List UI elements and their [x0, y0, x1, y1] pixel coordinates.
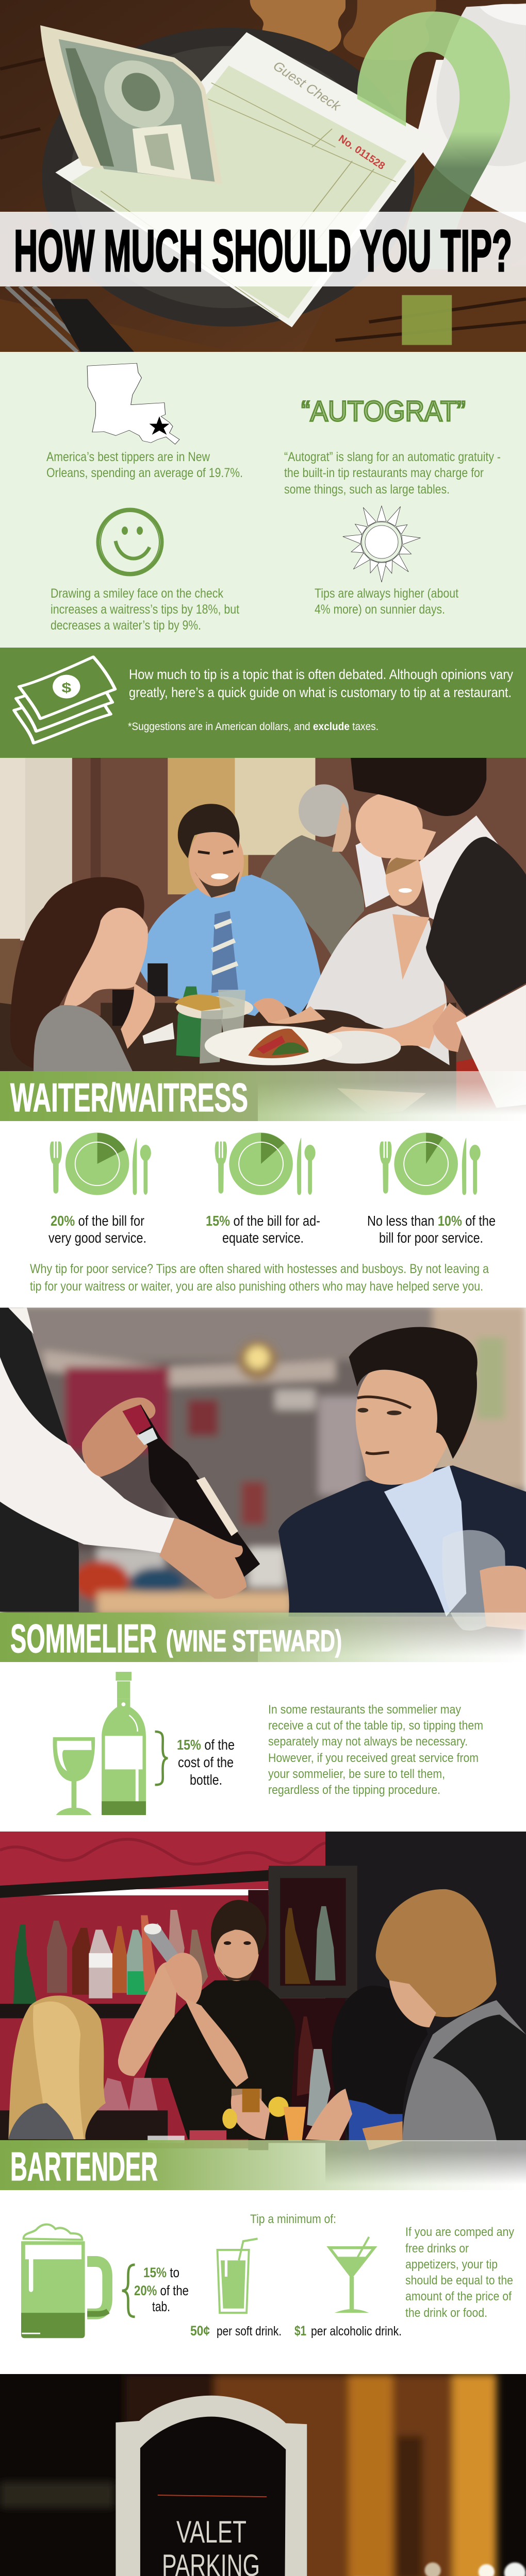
title band [0, 212, 526, 286]
footnote: *Suggestions are in American dollars, and exclude taxes. [128, 721, 379, 733]
text: alcoholic drink tip: per alcoholic drink. [311, 2324, 402, 2338]
note: sommelier: However, if you received great service from [268, 1751, 479, 1765]
text: 15% of bottle: 15% of the [177, 1737, 235, 1753]
photo: waitress serving diners [0, 756, 526, 1124]
fact: sunny days: 4% more) on sunnier days. [315, 602, 445, 617]
icon: beer mug [21, 2225, 135, 2338]
text: 15% tip: equate service. [222, 1230, 304, 1246]
note: comped drinks [405, 2225, 514, 2320]
icon: sun [342, 504, 421, 582]
guest check lettering: Guest Check [271, 58, 344, 114]
sign lettering [146, 2515, 273, 2576]
white fade under photo [258, 1623, 526, 1662]
heading: sommelier: SOMMELIER [10, 1616, 157, 1661]
text: 10% tip: No less than 10% of the [367, 1213, 496, 1229]
plate: 15% [215, 1132, 316, 1195]
note: comped drinks: the drink or food. [405, 2306, 487, 2320]
note: sommelier: In some restaurants the sommelier may [268, 1703, 461, 1717]
icon: soft drink [218, 2239, 258, 2313]
fact: Autograt: some things, such as large tables. [284, 482, 450, 497]
text: 15% of bottle [177, 1737, 235, 1788]
fact: smiley: increases a waitress’s tips by 18%, but [51, 602, 239, 617]
text: 20% tip: 20% of the bill for [51, 1213, 144, 1229]
text: soft drink tip: 50¢ [190, 2323, 210, 2338]
white fade under photo [258, 2151, 526, 2190]
white fade under photo [258, 1082, 526, 1121]
text: 15% to 20%: 20% of the [134, 2283, 189, 2298]
heading: Autograt: “AUTOGRAT” [301, 395, 466, 427]
guest check lettering: No. 011528 [336, 133, 387, 172]
fact: New Orleans [46, 450, 243, 480]
icon: stack of money [14, 657, 115, 743]
text: 15% of bottle: bottle. [190, 1772, 222, 1788]
icon: stack of money: $ [61, 680, 71, 696]
fact: smiley: Drawing a smiley face on the check [51, 586, 223, 601]
icon: smiley [98, 510, 162, 574]
text: 20% tip: very good service. [48, 1230, 146, 1246]
note: comped drinks: free drinks or [405, 2242, 469, 2256]
note: sommelier [268, 1703, 483, 1797]
plate: 20% [50, 1132, 151, 1195]
panel: intro [0, 648, 526, 758]
fact: New Orleans: Orleans, spending an average of 19.7%. [46, 466, 243, 480]
brace [122, 2265, 135, 2317]
note: comped drinks: appetizers, your tip [405, 2258, 498, 2272]
note: sommelier: receive a cut of the table tip, so tipping them [268, 1719, 483, 1733]
photo: bartender shaking a cocktail [0, 1832, 526, 2193]
note: why tip for poor service [30, 1262, 489, 1294]
fact: Autograt: the built-in tip restaurants may charge for [284, 466, 484, 480]
plate: 10% [380, 1132, 481, 1195]
photo: sommelier presenting wine [0, 1304, 526, 1666]
section band: waiter [0, 1071, 526, 1121]
section band: sommelier [0, 1613, 526, 1662]
text: 15% of bottle: cost of the [178, 1754, 234, 1770]
fact: sunny days: Tips are always higher (about [315, 586, 458, 601]
section band: bartender [0, 2140, 526, 2190]
text: alcoholic drink tip [294, 2323, 402, 2338]
heading: bartender: BARTENDER [10, 2144, 158, 2189]
fact: smiley [51, 586, 239, 633]
heading: sommelier: (WINE STEWARD) [166, 1624, 342, 1658]
panel: tipping facts [0, 352, 526, 648]
text: soft drink tip: per soft drink. [217, 2324, 282, 2338]
note: comped drinks: If you are comped any [405, 2225, 514, 2239]
fact: smiley: decreases a waiter’s tip by 9%. [51, 618, 201, 633]
note: sommelier: regardless of the tipping procedure. [268, 1783, 440, 1797]
fact: Autograt [284, 450, 501, 497]
photo: valet parking sign [0, 2374, 526, 2576]
text: 15% tip: 15% of the bill for ad- [206, 1213, 320, 1229]
chart: three plates showing tip share [50, 1132, 481, 1195]
text: 15% to 20%: tab. [152, 2299, 170, 2314]
guest check lettering [271, 58, 387, 172]
icon: wine bottle and glass [53, 1672, 168, 1816]
heading: waiter/waitress: WAITER/WAITRESS [10, 1075, 248, 1120]
note: sommelier: your sommelier, be sure to tell them, [268, 1767, 445, 1781]
icon: Louisiana map with star [87, 363, 179, 444]
hero photo: tip on a guest check [0, 0, 526, 352]
note: comped drinks: amount of the price of [405, 2290, 512, 2303]
note: comped drinks: should be equal to the [405, 2274, 513, 2287]
text: 20% tip [48, 1213, 146, 1246]
fact: New Orleans: America’s best tippers are in New [46, 450, 210, 464]
text: alcoholic drink tip: $1 [294, 2323, 306, 2338]
intro text [129, 667, 513, 700]
note: sommelier: separately may not always be necessary. [268, 1735, 468, 1749]
sign lettering: VALET [176, 2515, 246, 2549]
text: 15% tip [206, 1213, 320, 1246]
text: 15% to 20%: 15% to [143, 2265, 179, 2280]
label: tip a minimum of: Tip a minimum of: [250, 2212, 336, 2226]
text: 10% tip [367, 1213, 496, 1246]
text: 15% to 20% [134, 2265, 189, 2314]
fact: sunny days [315, 586, 458, 617]
text: soft drink tip [190, 2323, 282, 2338]
text: 10% tip: bill for poor service. [379, 1230, 483, 1246]
icon: martini [330, 2237, 374, 2313]
